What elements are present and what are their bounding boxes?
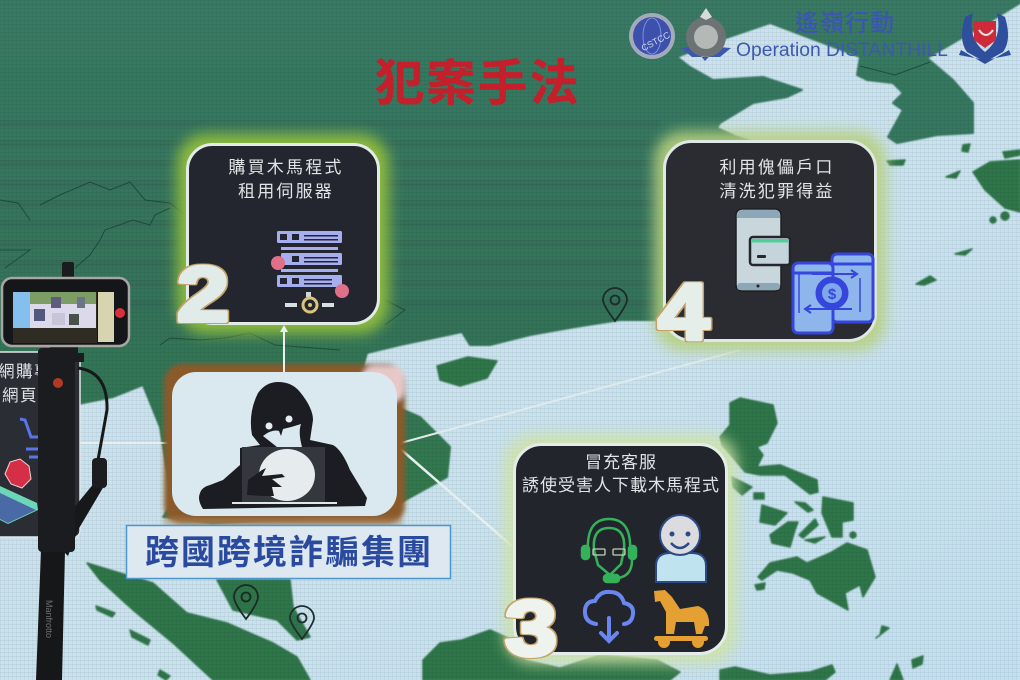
strap lower band [62, 482, 104, 556]
panel: hacker [172, 372, 397, 516]
logo: Hong Kong police badge [681, 8, 731, 61]
panel: card 2 buy trojan and rent server [177, 144, 378, 338]
mainland asia [0, 0, 1020, 523]
phone [2, 278, 129, 346]
panel: partially hidden card 1 [0, 352, 80, 537]
icon: hooded hacker at laptop [199, 382, 367, 509]
icon: trojan horse [654, 590, 709, 648]
logos and operation header [629, 8, 1011, 64]
icon: server rack [271, 231, 349, 312]
card 4 text: 清洗犯罪得益 [719, 182, 835, 201]
icon: smiling victim [656, 515, 706, 582]
card 3 text: 誘使受害人下載木馬程式 [522, 475, 720, 495]
label: transnational fraud syndicate [126, 526, 450, 578]
logo: CSTCC globe: CSTCC [640, 30, 672, 53]
record button [115, 308, 125, 318]
card 3 text: 冒充客服 [585, 453, 657, 472]
icon: blue money transfer phones: $ [828, 286, 837, 303]
country border lines [0, 62, 930, 350]
phone screen [13, 292, 97, 343]
pole red button [53, 378, 63, 388]
strap clip [92, 458, 107, 488]
malay peninsula [217, 580, 310, 640]
icon: cloud download [585, 592, 633, 641]
philippines [720, 398, 818, 494]
glow: card 4 [654, 131, 886, 351]
heading: operation english name: Operation DISTANTHILL [736, 40, 948, 61]
card 1 text: 網頁 [2, 386, 38, 405]
phone mount [38, 262, 84, 362]
glow: card 2 [177, 134, 389, 334]
label: transnational fraud syndicate: 跨國跨境詐騙集團 [145, 534, 433, 572]
arrow: hacker to card 2 [280, 325, 288, 372]
panel: card 3 impersonate customer service [505, 444, 726, 672]
map pin: singapore [290, 606, 314, 639]
connector: line to card 1 [80, 442, 172, 444]
strap [78, 368, 107, 460]
glow: hacker panel [163, 364, 405, 526]
glow: card 3 [504, 434, 737, 664]
card 2 text: 租用伺服器 [238, 182, 334, 201]
title: 犯案手法 [375, 57, 581, 111]
sumatra [87, 563, 310, 680]
number 3: 3 [505, 585, 557, 672]
borneo [423, 630, 680, 680]
connector: line to card 4 [397, 350, 740, 444]
card 2 text: 購買木馬程式 [228, 158, 344, 177]
number 2: 2 [177, 251, 229, 338]
monopod pole upper [38, 348, 75, 552]
panel: card 4 launder via mule accounts [658, 142, 876, 357]
icon: shopping cart and malicious laptop [0, 419, 42, 524]
icon: phone with bank card [736, 209, 790, 291]
connector: line to card 3 [397, 446, 512, 546]
logo: CSTCC globe [629, 13, 675, 59]
icon: customer service agent headset [582, 519, 636, 582]
number 4: 4 [658, 268, 709, 357]
icon: blue money transfer phones [793, 254, 873, 333]
islands [87, 144, 1020, 680]
map pin: malay north [234, 585, 258, 619]
map pin: south china [603, 288, 627, 321]
monopod and phone in foreground [2, 262, 129, 680]
card 4 text: 利用傀儡戶口 [719, 158, 835, 177]
pole brand text: Manfrotto [44, 600, 54, 638]
logo: Singapore police crest [959, 13, 1011, 64]
heading: operation chinese name: 遙嶺行動 [795, 10, 895, 37]
monopod pole lower [36, 550, 65, 680]
horizontal screen bands [0, 110, 660, 320]
